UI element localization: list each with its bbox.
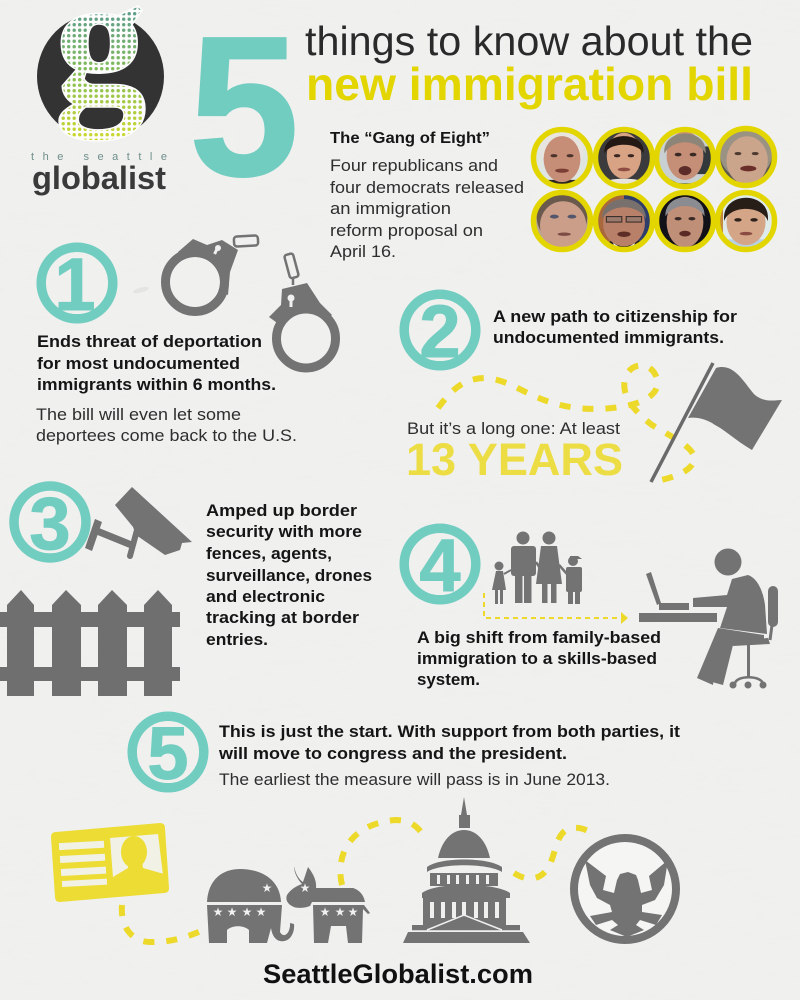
point 3 text: security with more bbox=[206, 522, 362, 541]
number badge 4: 4 bbox=[419, 524, 461, 607]
icon: presidential eagle seal bbox=[574, 838, 676, 940]
point 1 heading: immigrants within 6 months. bbox=[37, 375, 276, 394]
point 1 heading: Ends threat of deportation bbox=[37, 332, 262, 351]
point 2 heading bbox=[493, 307, 737, 347]
footer: website: SeattleGlobalist.com bbox=[263, 959, 533, 989]
illustration: path to passage bbox=[51, 797, 676, 943]
dashed path to flag bbox=[438, 366, 694, 482]
point 3 text: and electronic bbox=[206, 587, 325, 606]
icon: open handcuff bbox=[166, 235, 258, 312]
dashed path: card to elephant bbox=[122, 905, 201, 942]
icon: republican elephant: ★ bbox=[242, 905, 252, 919]
point 4 text bbox=[417, 628, 661, 689]
number badge 3 bbox=[14, 482, 86, 565]
icon: democrat donkey: ★ bbox=[320, 905, 330, 919]
point 3 text: fences, agents, bbox=[206, 544, 332, 563]
number badge 1: 1 bbox=[54, 243, 96, 326]
point 1 heading: for most undocumented bbox=[37, 354, 240, 373]
icon: capitol building bbox=[403, 797, 530, 943]
icon: republican elephant: ★ bbox=[213, 905, 223, 919]
icon: democrat donkey: ★ bbox=[300, 881, 310, 895]
icon: republican elephant: ★ bbox=[262, 881, 272, 895]
icon: democrat donkey: ★ bbox=[335, 905, 345, 919]
portrait 1 bbox=[530, 126, 593, 190]
point 2 heading: A new path to citizenship for bbox=[493, 307, 737, 326]
big number five: 5 bbox=[189, 0, 299, 218]
icon: flag bbox=[651, 363, 782, 482]
panel: point 2 citizenship bbox=[404, 290, 782, 485]
point 1 detail bbox=[36, 405, 297, 445]
icon: family bbox=[492, 532, 582, 604]
icon: surveillance camera bbox=[85, 487, 192, 556]
icon: id card bbox=[51, 823, 169, 902]
point 1 detail: deportees come back to the U.S. bbox=[36, 426, 297, 445]
stat: 13 years: 13 YEARS bbox=[406, 434, 623, 485]
gang of eight description: Four republicans and bbox=[330, 156, 498, 175]
point 3 text: tracking at border bbox=[206, 608, 359, 627]
text block: gang of eight bbox=[330, 130, 524, 261]
number badge 1 bbox=[41, 243, 113, 326]
point 3 text: Amped up border bbox=[206, 501, 357, 520]
point 2 heading: undocumented immigrants. bbox=[493, 328, 724, 347]
logo wordmark: globalist bbox=[32, 160, 166, 196]
point 1 detail: The bill will even let some bbox=[36, 405, 241, 424]
point 3 text: surveillance, drones bbox=[206, 566, 372, 585]
title line one: things to know about the bbox=[305, 18, 753, 64]
portrait 7 bbox=[654, 190, 716, 252]
icon: republican elephant bbox=[207, 869, 294, 943]
icon: democrat donkey bbox=[286, 866, 370, 943]
number badge 4 bbox=[404, 524, 476, 607]
point 3 text: entries. bbox=[206, 630, 268, 649]
gang of eight heading: The “Gang of Eight” bbox=[330, 130, 490, 147]
number badge 2 bbox=[404, 290, 476, 373]
point 4 text: A big shift from family-based bbox=[417, 628, 661, 647]
arrow: family to skills bbox=[484, 593, 628, 624]
portrait 6 bbox=[593, 190, 654, 252]
icon: republican elephant: ★ bbox=[256, 905, 266, 919]
gang of eight description bbox=[330, 156, 524, 261]
panel: point 3 border security bbox=[0, 482, 372, 696]
point 2 note: But it’s a long one: At least bbox=[407, 419, 620, 438]
portrait 8 bbox=[716, 190, 778, 252]
icon: person at desk bbox=[639, 548, 778, 688]
point 5 heading: will move to congress and the president. bbox=[218, 744, 567, 763]
gang of eight description: four democrats released bbox=[330, 178, 524, 197]
icon: republican elephant: ★ bbox=[227, 905, 237, 919]
title bbox=[305, 18, 753, 110]
portrait 3 bbox=[654, 126, 716, 190]
icon: fence bbox=[0, 590, 180, 696]
portrait 5 bbox=[529, 188, 595, 254]
number badge 5 bbox=[132, 712, 204, 795]
panel: point 1 deportation bbox=[36, 235, 336, 445]
point 4 text: system. bbox=[417, 670, 480, 689]
icon: democrat donkey: ★ bbox=[348, 905, 358, 919]
gang of eight description: April 16. bbox=[330, 242, 396, 261]
icon: closed handcuff bbox=[269, 253, 336, 368]
number badge 5: 5 bbox=[147, 712, 189, 795]
logo: the seattle globalist bbox=[31, 0, 167, 196]
point 3 text bbox=[206, 501, 372, 649]
point 4 text: immigration to a skills-based bbox=[417, 649, 657, 668]
panel: point 4 family to skills bbox=[404, 524, 778, 689]
number badge 3: 3 bbox=[29, 482, 71, 565]
portraits: gang of eight senators bbox=[528, 122, 780, 256]
portrait 4 bbox=[715, 126, 778, 188]
title line two: new immigration bill bbox=[306, 58, 753, 110]
portrait 2 bbox=[593, 126, 654, 190]
number badge 2: 2 bbox=[419, 290, 461, 373]
dashed path: donkey to capitol bbox=[340, 820, 425, 885]
dashed path: capitol to eagle bbox=[514, 828, 594, 879]
point 1 heading bbox=[37, 332, 276, 394]
gang of eight description: reform proposal on bbox=[330, 221, 483, 240]
point 5 detail: The earliest the measure will pass is in June 2013. bbox=[219, 770, 610, 789]
panel: point 5 next steps bbox=[132, 712, 680, 795]
point 5 heading: This is just the start. With support from both parties, it bbox=[219, 722, 680, 741]
point 5 heading bbox=[218, 722, 680, 763]
logo tagline: the seattle bbox=[31, 151, 167, 163]
gang of eight description: an immigration bbox=[330, 199, 451, 218]
